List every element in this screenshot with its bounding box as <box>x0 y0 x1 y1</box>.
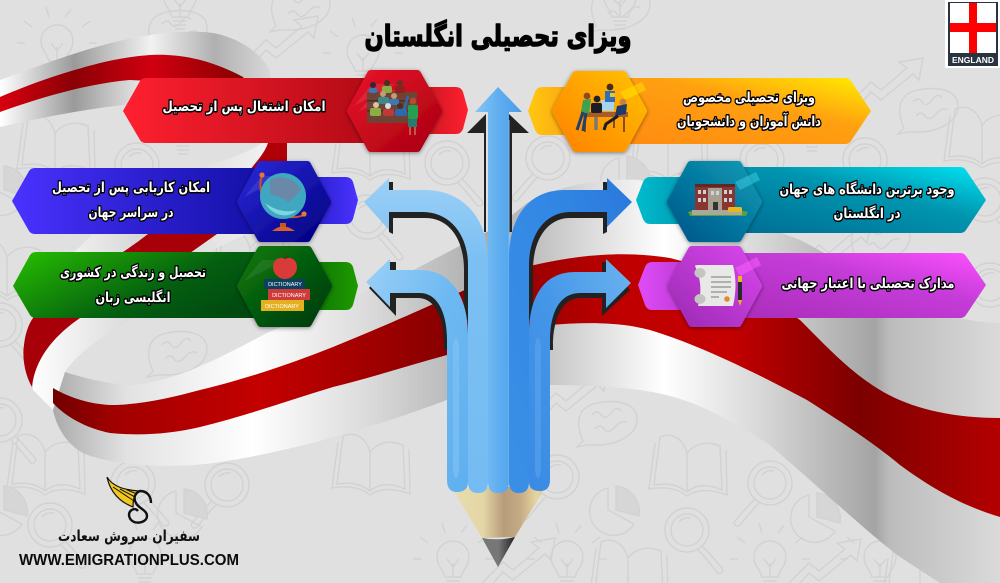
card: top universities in England (teal): در انگلستان <box>834 205 900 222</box>
icon: apple and dictionaries: DICTIONARY <box>268 282 302 288</box>
icon: England flag <box>945 0 1000 68</box>
icon: scroll and pen <box>694 265 742 306</box>
ribbon: upper-left swoosh <box>0 32 272 127</box>
card: global career after study (blue): در سراسر جهان <box>88 205 174 221</box>
label text: وجود برترین دانشگاه های جهان <box>780 181 954 198</box>
pencil with arrows <box>364 87 632 567</box>
icon: apple and dictionaries: DICTIONARY <box>265 304 299 310</box>
ribbon: right band <box>500 180 1000 583</box>
icon: apple and dictionaries <box>261 255 310 311</box>
arrow shadows <box>369 114 630 350</box>
label text: ویزای تحصیلی مخصوص <box>683 90 815 106</box>
label text: تحصیل و زندگی در کشوری <box>60 264 206 281</box>
icon: England flag: ENGLAND <box>952 55 994 65</box>
arrow: lower left <box>366 259 468 492</box>
icon: team at table <box>577 84 628 132</box>
pencil tip: graphite <box>482 537 515 567</box>
icon: lecture hall <box>367 80 418 135</box>
arrow: upper right <box>509 178 632 493</box>
title: ویزای تحصیلی انگلستان <box>364 19 632 53</box>
card: study and life in English-speaking country (green): انگلیسی زبان <box>96 289 170 306</box>
label text: امکان اشتغال پس از تحصیل <box>162 99 326 115</box>
arrow: centre up <box>475 87 522 493</box>
pencil tip: wood <box>452 486 546 538</box>
icon: apple and dictionaries: DICTIONARY <box>272 293 306 299</box>
label text: امکان کاریابی پس از تحصیل <box>52 180 210 196</box>
icon: golden wing bird <box>107 477 151 523</box>
arrow: lower right <box>529 259 631 491</box>
company name: سفیران سروش سعادت <box>58 527 200 545</box>
logo <box>19 477 239 569</box>
card: special study visa for students (orange) <box>528 75 871 148</box>
ribbon: left twist <box>23 143 287 410</box>
card: globally accredited degrees (purple) <box>638 250 986 323</box>
icon: university building <box>688 184 748 216</box>
card: special study visa for students (orange): دانش آموزان و دانشجویان <box>677 112 821 130</box>
card: top universities in England (teal) <box>636 165 986 238</box>
arrow: upper left <box>364 178 488 493</box>
label text: مدارک تحصیلی با اعتبار جهانی <box>782 276 954 292</box>
card: study and life in English-speaking country (green) <box>13 250 358 323</box>
card: job after study (red) <box>123 74 468 148</box>
icon: globe <box>259 172 307 231</box>
card: global career after study (blue) <box>12 165 358 238</box>
ribbon: lower-left band <box>53 225 500 466</box>
website: WWW.EMIGRATIONPLUS.COM <box>19 552 239 569</box>
